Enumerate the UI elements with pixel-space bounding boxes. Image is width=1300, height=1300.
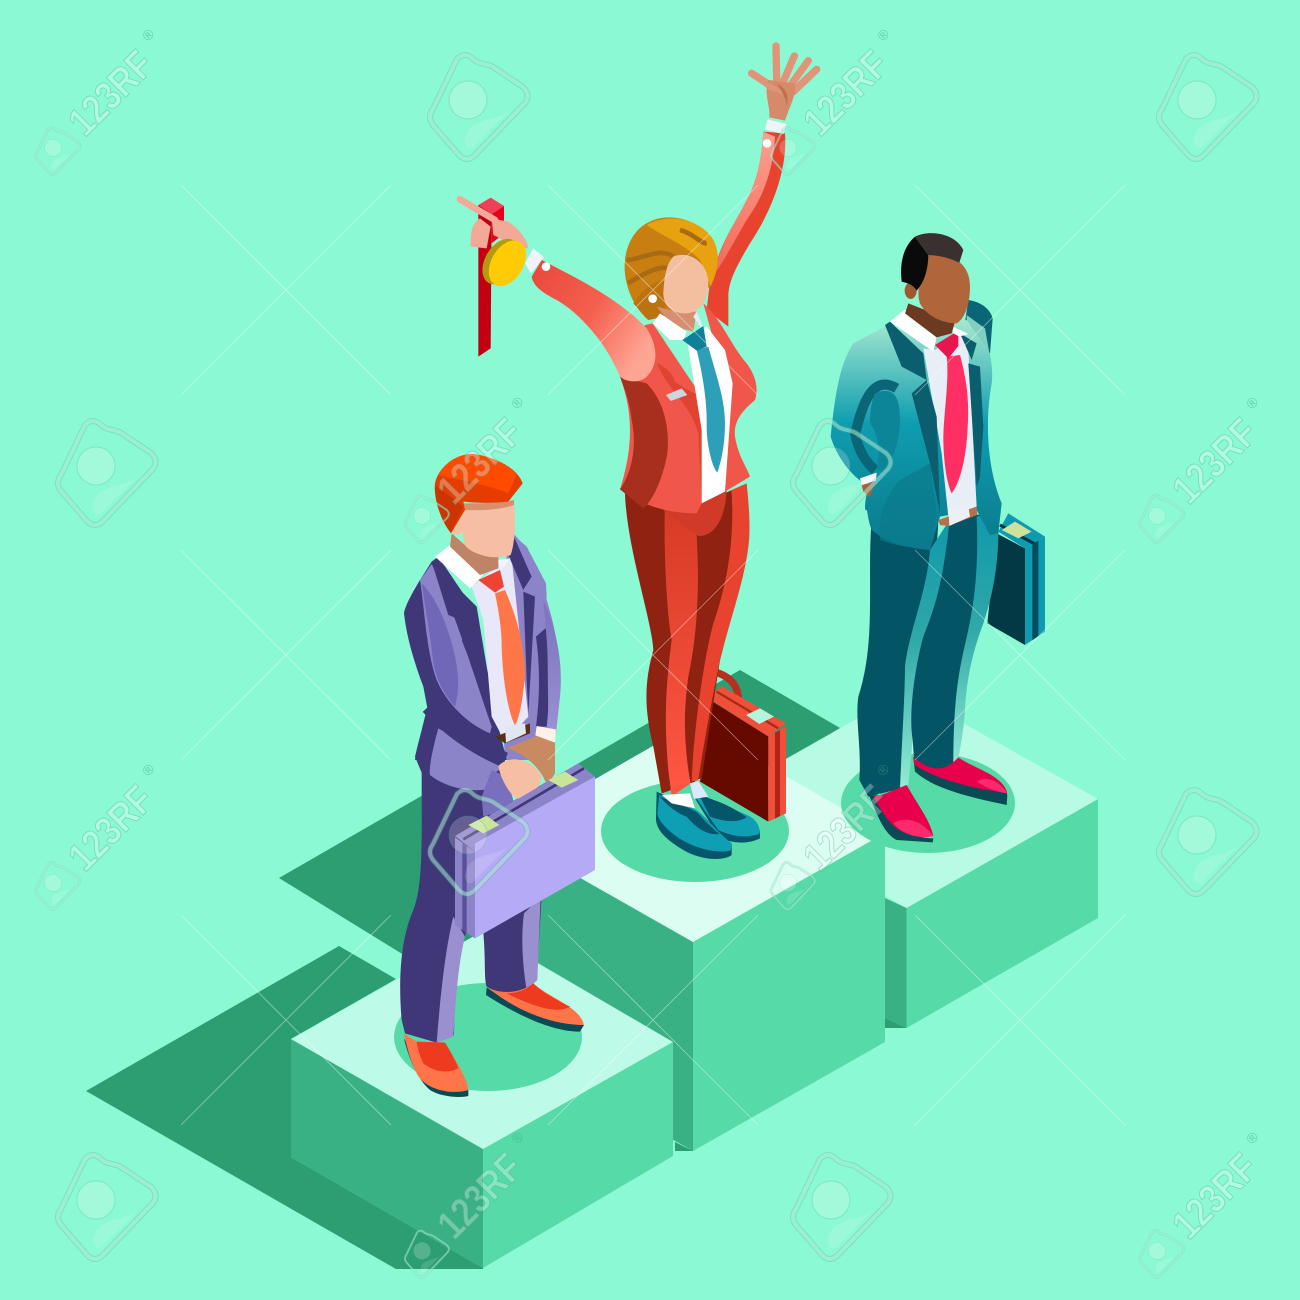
raised hand <box>752 46 817 121</box>
watermark: stock logos: ® <box>508 1128 527 1147</box>
ribbon <box>478 198 504 214</box>
red briefcase <box>700 673 786 822</box>
shirt and tie <box>472 558 528 742</box>
purple briefcase <box>455 763 595 938</box>
teal suit torso, head <box>831 233 1002 550</box>
podium: centre block <box>501 723 1015 1151</box>
neck <box>657 307 697 332</box>
watermark: stock logos: ® <box>508 393 527 412</box>
red suit legs and shoes <box>625 483 760 859</box>
watermark: stock logos: ® <box>139 760 158 779</box>
watermark: stock logos: ® <box>1243 393 1262 412</box>
red suit torso, arms, head, medal <box>460 46 817 513</box>
purple suit torso, head <box>404 454 561 760</box>
watermark crosshair lines <box>181 185 1125 1125</box>
orange shoes <box>486 987 584 1032</box>
watermark: stock logos: 123RF <box>429 1146 531 1247</box>
teal briefcase <box>987 513 1045 645</box>
podium: left block <box>291 931 673 1268</box>
medal <box>475 232 534 293</box>
watermark: stock logos: ® <box>139 25 158 44</box>
watermark: stock logos: 123RF <box>795 778 897 879</box>
teal suit legs and shoes <box>857 510 1007 842</box>
watermark: stock logos: ® <box>874 25 893 44</box>
hair <box>625 217 718 320</box>
cast shadows <box>86 670 840 1269</box>
pointing arm <box>532 260 655 381</box>
purple suit legs and shoes <box>400 750 584 1097</box>
shirt and tie <box>687 327 733 503</box>
watermark: stock logos: 123RF <box>429 411 531 512</box>
watermark: stock logos: ® <box>874 760 893 779</box>
shirt and tie <box>923 333 977 517</box>
jacket hem, hands <box>415 707 556 817</box>
hand holding medal <box>471 218 491 248</box>
jacket <box>620 323 702 513</box>
watermark: stock logos: 123RF <box>1164 411 1266 512</box>
blue shoes <box>695 795 760 843</box>
watermark: stock logos: ® <box>1243 1128 1262 1147</box>
podium: right block <box>715 691 1098 1028</box>
watermark: stock logos: 123RF <box>1164 1146 1266 1247</box>
figure: woman in red suit with medal <box>460 46 817 859</box>
figure: man with teal suit <box>831 233 1045 842</box>
raised arm <box>707 132 785 327</box>
watermark: stock logos: 123RF <box>795 43 897 144</box>
watermark: stock logos: 123RF <box>60 778 162 879</box>
watermark: stock logos: 123RF <box>60 43 162 144</box>
figure: man in purple suit <box>400 454 595 1097</box>
